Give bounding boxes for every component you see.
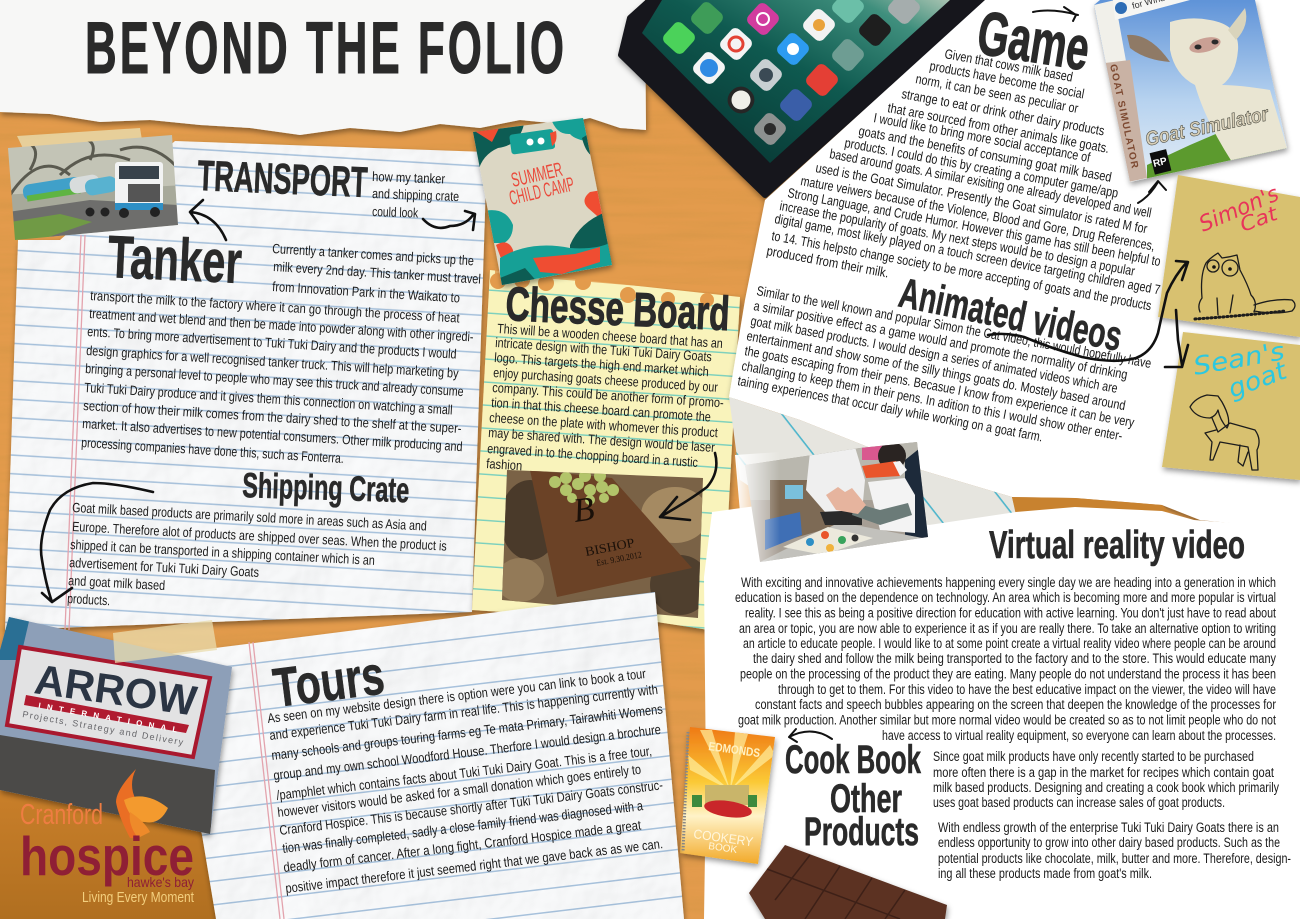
text block: animated videos: Similar to the well known and popular Simon the Cat video, this would hopefully have bbox=[755, 283, 1152, 371]
arrow: cook book heading to cover bbox=[789, 729, 832, 742]
text block: tours: group and my own school Woodford House. Therfore I would design a brochure bbox=[273, 722, 662, 783]
goat simulator box: RP bbox=[1152, 156, 1169, 170]
text block: chesse board: fashion bbox=[486, 456, 523, 473]
text block: cook book: uses goat based products can increase sales of goat products. bbox=[933, 795, 1225, 810]
text block: shipping crate: shipped it can be transported in a shipping container which is an bbox=[70, 537, 375, 568]
text block: tours: however visitors would be asked for a small donation which goes entirely to bbox=[277, 762, 642, 820]
text block: shipping crate: and goat milk based bbox=[68, 573, 165, 593]
arrow: cheese text to photo bbox=[660, 453, 716, 520]
text block: tanker: transport the milk to the factory where it can go through the process of heat bbox=[90, 288, 460, 326]
chocolate bar bbox=[749, 845, 947, 919]
panel: lower torn paper bbox=[704, 500, 1300, 919]
text block: game: produced from their milk. bbox=[765, 243, 890, 281]
panel: chesse board note bbox=[472, 268, 740, 632]
photo: engraved chopping board bbox=[502, 470, 703, 618]
sticky note: simon's cat: Simon's bbox=[1196, 182, 1283, 238]
goat simulator box: Goat Simulator bbox=[1143, 103, 1271, 151]
text block: animated videos: a similar positive effect as a game would and promote the normality of drinking bbox=[752, 298, 1129, 382]
text block: tours: and experience Tuki Tuki Dairy farm in real life. This is happening currently with bbox=[269, 682, 659, 743]
text block: animated videos bbox=[736, 283, 1152, 444]
text block: shipping crate: products. bbox=[67, 591, 111, 608]
sticky note: simon's cat bbox=[1158, 175, 1300, 337]
photo: engraved chopping board: BISHOP bbox=[584, 535, 636, 559]
text block: tanker: ents. To bring more advertisement to Tuki Tuki Dairy and the products I would bbox=[87, 324, 457, 362]
heading: tours: Tours bbox=[270, 643, 388, 719]
heading: chesse board: Chesse Board bbox=[505, 278, 731, 341]
arrow: game to box bbox=[1033, 7, 1078, 21]
heading: other: Other bbox=[830, 777, 902, 821]
text block: chesse board: company. This could be another form of promo- bbox=[492, 380, 724, 410]
photo: arrow international shipping container: Projects, Strategy and Delivery bbox=[22, 709, 186, 748]
note: how my tanker: could look bbox=[372, 204, 419, 221]
cook book cover bbox=[680, 727, 775, 864]
photo: engraved chopping board: Est. 9.30.2012 bbox=[595, 549, 643, 568]
text block: shipping crate: Europe. Therefore alot of products are shipped over seas. When the product is bbox=[72, 519, 447, 554]
text block: tanker: treatment and wet blend and then be made into powder along with other ingredi- bbox=[89, 306, 474, 344]
text block: other products bbox=[938, 820, 1291, 881]
text block: game: products have become the social bbox=[928, 58, 1086, 102]
text block: chesse board bbox=[486, 321, 724, 473]
text block: tours: deadly form of cancer. After a long fight, Cranford Hospice made a great bbox=[283, 817, 642, 875]
text block: chesse board: logo. This targets the high end market which bbox=[494, 350, 709, 379]
text block: chesse board: intricate design with the Tuki Tuki Dairy Goats bbox=[495, 335, 713, 364]
note: how my tanker: and shipping crate bbox=[372, 186, 459, 204]
cook book cover: EDMONDS bbox=[708, 739, 761, 760]
text block: game: that are sourced from other animals like goats. bbox=[886, 100, 1110, 156]
text block: tanker: from Innovation Park in the Waikato to bbox=[272, 279, 460, 305]
sticky note: sean's goat: Sean's bbox=[1191, 336, 1287, 381]
text block: tours: /pamphlet which contains facts about Tuki Tuki Dairy Goat. This is a free tour, bbox=[276, 743, 653, 803]
text block: game: digital game, most likely played on a touch screen device targeting children aged 7 bbox=[773, 211, 1162, 297]
text block: shipping crate: advertisement for Tuki Tuki Dairy Goats bbox=[69, 555, 260, 580]
text block: game: goats and the benefits of consuming goat milk based bbox=[857, 123, 1113, 185]
note: how my tanker: how my tanker bbox=[372, 169, 446, 187]
arrow: shipping crate to container bbox=[41, 483, 153, 602]
text block: tanker: processing companies have done this, such as Fonterra. bbox=[81, 435, 344, 466]
arrow: game text to box bbox=[1138, 181, 1166, 203]
text block: tanker: milk every 2nd day. This tanker must travel bbox=[273, 259, 481, 287]
text block: tours: tion was finally completed, sadly a close family friend was diagnosed with a bbox=[282, 798, 644, 856]
icon: simon's cat drawing bbox=[1195, 253, 1295, 319]
wood patch in tear bbox=[1012, 497, 1170, 515]
text block: animated videos: goat milk based products. I would design a series of animated videos which are bbox=[749, 313, 1119, 396]
logo: cranford hospice: Living Every Moment bbox=[82, 889, 195, 906]
text block: tanker: design graphics for a well recognised tanker truck. This will help marketing by bbox=[86, 343, 459, 381]
top torn paper bbox=[0, 0, 646, 135]
text block: other products: ing all these products made from goat's milk. bbox=[938, 866, 1152, 881]
text block: game: strange to eat or drink other dairy products bbox=[900, 86, 1106, 139]
text block: chesse board: engraved in to the chopping board in a rustic bbox=[487, 441, 699, 470]
text block: animated videos: the goats escaping from their pens. Becasue I know from experience it can be very bbox=[743, 343, 1136, 430]
panel: tours lined paper bbox=[150, 590, 690, 919]
text block: tanker: market. It also advertises to new potential consumers. Other milk producing and bbox=[82, 416, 463, 454]
logo: cranford hospice bbox=[20, 769, 195, 906]
text block: tours: positive impact therefore it just seemed right that we gave back as as we can. bbox=[285, 836, 664, 896]
sticky note: sean's goat: goat bbox=[1224, 355, 1292, 404]
text block: chesse board: may be shared with. The design would be laser bbox=[488, 425, 716, 455]
heading: transport: TRANSPORT bbox=[197, 152, 368, 207]
tape: truck photo bbox=[17, 128, 144, 163]
text block: shipping crate: Goat milk based products are primarily sold more in areas such as Asia and bbox=[72, 500, 427, 534]
photo: arrow international shipping container: INTERNATIONAL bbox=[38, 701, 182, 735]
heading: shipping crate: Shipping Crate bbox=[242, 466, 410, 510]
poster: summer child camp bbox=[470, 115, 620, 290]
text block: game bbox=[765, 46, 1162, 313]
text block: animated videos: challanging to keep them in their pens. In adition to this I would show other enter- bbox=[740, 358, 1124, 443]
text block: tanker: section of how their milk comes from the dairy shed to the shelf at the super- bbox=[83, 398, 462, 436]
text block: tanker: bringing a personal level to people who may see this truck and already consume bbox=[85, 361, 464, 399]
text block: cook book bbox=[933, 749, 1279, 810]
cook book cover: BOOK bbox=[708, 841, 738, 856]
text block: chesse board: This will be a wooden cheese board that has an bbox=[497, 321, 723, 351]
poster: summer child camp: SUMMER bbox=[509, 159, 565, 192]
heading: cook book: Cook Book bbox=[785, 738, 921, 782]
text block: chesse board: enjoy purchasing goats cheese produced by our bbox=[493, 365, 719, 395]
text block: game: products. I could do this by creating a computer game/app bbox=[843, 135, 1120, 201]
logo: cranford hospice: hospice bbox=[20, 825, 194, 887]
text block: game: mature veiwers because of the Violence, Blood and Gore, Drug References, bbox=[799, 173, 1156, 254]
photo: arrow international shipping container: ARROW bbox=[32, 655, 200, 725]
text block: game: increase the popularity of goats. My next steps would be to design a popular bbox=[778, 198, 1137, 279]
heading: game: Game bbox=[973, 0, 1094, 84]
goat simulator box bbox=[1094, 0, 1287, 182]
note: how my tanker bbox=[372, 169, 459, 221]
title: BEYOND THE FOLIO bbox=[85, 8, 567, 89]
text block: game: I would like to bring more social acceptance of bbox=[872, 110, 1092, 165]
text block: shipping crate bbox=[67, 500, 447, 608]
text block: tours: As seen on my website design there is option were you can link to book a tour bbox=[267, 666, 647, 726]
arrow: animated videos underline to simon's cat bbox=[988, 261, 1188, 361]
text block: tours: Cranford Hospice. This is because shortly after Tuki Tuki Dairy Goats construc- bbox=[279, 777, 664, 838]
text block: game: Given that cows milk based bbox=[943, 46, 1074, 85]
logo: cranford hospice: Cranford bbox=[20, 799, 103, 831]
panel: transport lined paper bbox=[0, 130, 500, 640]
photo: arrow international shipping container bbox=[0, 617, 232, 840]
logo: cranford hospice: hawke's bay bbox=[127, 874, 194, 890]
text block: game: used is the Goat Simulator. Presently the Goat simulator is rated M for bbox=[814, 160, 1149, 236]
goat simulator box: GOAT SIMULATOR bbox=[1107, 63, 1140, 171]
panel: game and animated videos torn paper bbox=[729, 0, 1300, 530]
heading: animated videos: Animated videos bbox=[895, 269, 1126, 360]
text block: animated videos: taining experiences that occur daily while working on a goat farm. bbox=[736, 373, 1044, 444]
text block: game: based around goats. A similar exisiting one already developed and well bbox=[828, 146, 1153, 221]
poster: summer child camp: CHILD CAMP bbox=[507, 174, 576, 210]
text block: game: norm, it can be seen as peculiar or bbox=[914, 71, 1080, 116]
tape: container photo bbox=[113, 620, 217, 663]
text block: chesse board: tion in that this cheese board can promote the bbox=[491, 395, 711, 425]
icon: kowhai flower bbox=[116, 769, 168, 838]
text block: game: to 14. This helpsto change society to be more accepting of goats and the products bbox=[770, 228, 1153, 313]
text block: tanker bbox=[81, 241, 481, 466]
text block: tanker: Currently a tanker comes and picks up the bbox=[272, 241, 474, 268]
heading: tanker: Tanker bbox=[106, 223, 243, 296]
photo: virtual reality headset bbox=[735, 442, 928, 562]
photo: engraved chopping board: B bbox=[571, 490, 597, 530]
text block: game: Strong Language, and Crude Humor. However this game has still been helpful to bbox=[786, 185, 1162, 269]
sticky note: simon's cat: Cat bbox=[1237, 201, 1282, 237]
heading: products: Products bbox=[804, 810, 919, 854]
icon: goat drawing bbox=[1190, 395, 1259, 470]
arrow: to sean's goat bbox=[1165, 310, 1188, 367]
text block: animated videos: entertainment and show some of the silly things goats do. Mostely based around bbox=[745, 328, 1127, 413]
text block: tours: many schools and groups touring farms eg Te mata Primary, Tairawhiti Womens bbox=[271, 701, 664, 763]
arrow: note to poster bbox=[423, 211, 475, 230]
text block: chesse board: cheese on the plate with whomever this product bbox=[489, 410, 718, 440]
phone bbox=[621, 0, 982, 195]
arrow: tanker to truck photo bbox=[190, 200, 226, 240]
cook book cover: COOKERY bbox=[693, 826, 754, 849]
text block: virtual reality video bbox=[735, 575, 1276, 743]
sticky note: sean's goat bbox=[1162, 332, 1300, 480]
text block: tours bbox=[267, 666, 664, 896]
lined paper behind torn edge bbox=[729, 397, 1016, 535]
photo: milk tanker truck bbox=[8, 135, 178, 240]
text block: tanker: Tuki Tuki Dairy produce and it gives them this connection on watching a small bbox=[84, 380, 453, 418]
